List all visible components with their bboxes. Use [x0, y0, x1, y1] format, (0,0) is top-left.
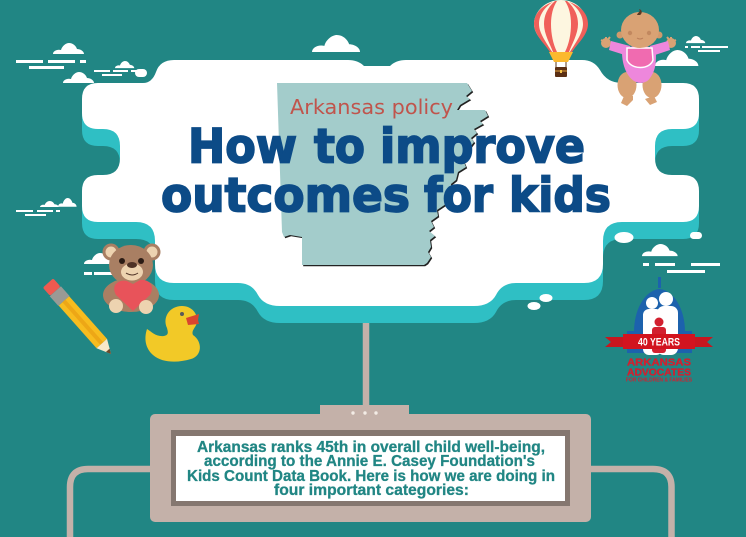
- icon: baby: [601, 9, 676, 106]
- logo: Arkansas Advocates: [605, 277, 713, 384]
- intro text: Arkansas ranks 45th in overall child well-being,: [197, 439, 545, 456]
- title: kids: [509, 168, 611, 224]
- title: outcomes: [161, 168, 410, 224]
- icon: teddy bear: [102, 244, 160, 314]
- icon: rubber duck: [145, 306, 200, 362]
- background clouds: [16, 35, 728, 275]
- logo: Arkansas Advocates: ARKANSAS: [627, 358, 691, 368]
- intro text: [187, 439, 555, 499]
- logo: Arkansas Advocates: FOR CHILDREN & FAMILIES: [626, 378, 693, 384]
- icon: hot air balloon: [534, 0, 588, 77]
- title: improve: [380, 120, 585, 174]
- title: to: [314, 120, 365, 174]
- panel: intro sign: [150, 405, 591, 522]
- panel: title cloud: [82, 60, 699, 323]
- title: [161, 120, 611, 224]
- map of Arkansas: [277, 83, 489, 266]
- subtitle: Arkansas policy: [290, 95, 453, 119]
- intro text: according to the Annie E. Casey Foundation's: [204, 453, 535, 470]
- connector pipes: [70, 320, 672, 537]
- logo: Arkansas Advocates: 40 YEARS: [638, 336, 680, 348]
- intro text: Kids Count Data Book. Here is how we are doing in: [187, 468, 555, 485]
- icon: pencil: [42, 278, 117, 359]
- intro text: four important categories:: [274, 482, 469, 499]
- title: for: [424, 168, 494, 224]
- logo: Arkansas Advocates: ADVOCATES: [627, 368, 691, 378]
- title: How: [188, 120, 297, 174]
- small white blobs: [528, 232, 720, 310]
